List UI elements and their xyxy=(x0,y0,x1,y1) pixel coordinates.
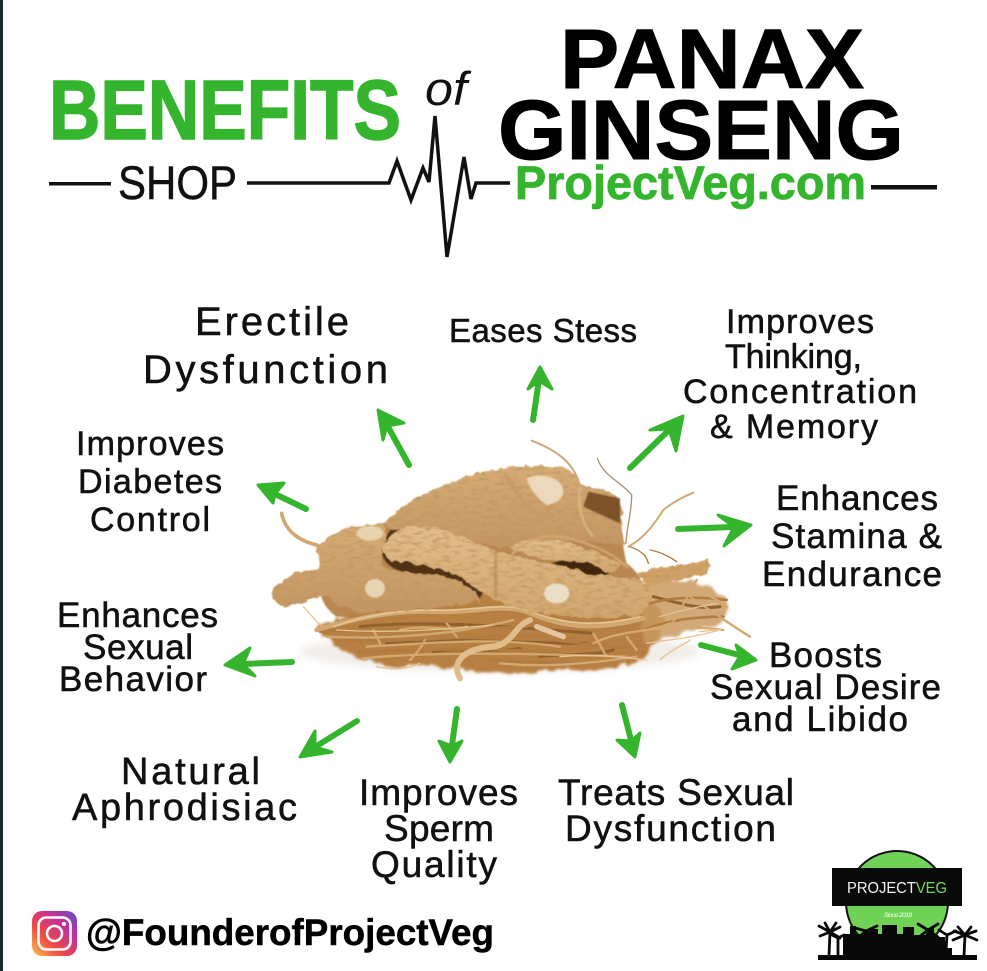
arrow: to sperm quality xyxy=(439,709,462,762)
header: heartbeat line xyxy=(247,116,510,257)
label: enhances stamina: Enhances xyxy=(776,479,938,518)
arrow: to treats dysfunction xyxy=(617,705,640,757)
logo skyline xyxy=(818,925,977,960)
right finger root xyxy=(508,540,622,573)
label: boosts desire: and Libido xyxy=(732,700,908,739)
label: improves diabetes control: Diabetes xyxy=(78,463,222,501)
logo palm trees xyxy=(819,923,977,956)
arrow: to sexual desire xyxy=(701,645,756,669)
base behind the main roots xyxy=(319,473,645,629)
arrow: to eases stress xyxy=(528,367,552,420)
label: improves thinking: Improves xyxy=(726,303,874,341)
label: erectile dysfunction xyxy=(143,300,388,392)
right fibre cluster xyxy=(643,579,729,643)
header: panax ginseng title xyxy=(498,12,904,177)
centre root xyxy=(383,526,651,618)
label: improves thinking: Concentration xyxy=(683,373,917,411)
pale highlights and ridges xyxy=(357,476,628,603)
dark shadow areas between roots xyxy=(381,530,493,598)
label: enhances stamina xyxy=(762,479,942,594)
label: improves sperm quality: Sperm xyxy=(384,808,494,849)
soft ground shadow xyxy=(300,632,700,672)
base mass of the fibrous rootlets xyxy=(315,597,663,673)
label: improves sperm quality: Quality xyxy=(371,844,498,885)
header: shop line with left rule xyxy=(49,156,237,209)
arrow: to stamina xyxy=(678,515,751,546)
label: enhances sexual behavior: Sexual xyxy=(83,628,193,667)
header: panax ginseng title: PANAX xyxy=(560,12,864,106)
logo: projectveg: Since 2019 xyxy=(884,912,912,919)
header: benefits heading: BENEFITS xyxy=(49,63,401,157)
label: boosts desire: Sexual Desire xyxy=(710,668,941,707)
arrow: to diabetes control xyxy=(258,483,306,509)
label: improves thinking xyxy=(683,303,917,446)
upper root xyxy=(387,466,624,548)
label: treats sexual dysfunction xyxy=(558,772,794,849)
header: the word of: of xyxy=(425,62,472,115)
instagram handle: @FounderofProjectVeg xyxy=(86,912,494,953)
arrow: to aphrodisiac xyxy=(300,721,357,757)
label: improves thinking: Thinking, xyxy=(725,338,862,376)
label: improves diabetes control xyxy=(76,425,224,539)
label: treats sexual dysfunction: Treats Sexual xyxy=(558,772,794,813)
header: shop line with left rule: SHOP xyxy=(118,156,237,209)
arrow: to erectile dysfunction xyxy=(378,410,409,465)
label: enhances stamina: Endurance xyxy=(762,555,942,594)
left root xyxy=(272,525,480,613)
label: erectile dysfunction: Dysfunction xyxy=(143,348,388,392)
label: enhances sexual behavior: Enhances xyxy=(57,596,218,635)
arrow: to sexual behavior xyxy=(225,648,292,676)
label: improves sperm quality: Improves xyxy=(359,772,518,813)
label: natural aphrodisiac xyxy=(72,751,297,829)
image: ginseng roots xyxy=(272,441,750,678)
label: enhances sexual behavior xyxy=(57,596,218,699)
arrow: to thinking and memory xyxy=(630,416,683,468)
left edge strip xyxy=(0,0,3,971)
label: enhances stamina: Stamina & xyxy=(771,517,942,556)
label: enhances sexual behavior: Behavior xyxy=(59,660,207,699)
label: erectile dysfunction: Erectile xyxy=(195,300,349,344)
label: eases stess: Eases Stess xyxy=(449,312,637,349)
header: website address with right rule: ProjectVeg.com xyxy=(515,156,866,209)
right tail root xyxy=(637,559,710,587)
header: panax ginseng title: GINSENG xyxy=(498,83,904,177)
fibrous rootlets xyxy=(282,441,750,678)
label: improves diabetes control: Control xyxy=(90,501,210,539)
label: boosts desire xyxy=(710,636,941,739)
label: improves thinking: & Memory xyxy=(710,408,878,446)
label: natural aphrodisiac: Natural xyxy=(121,751,260,793)
label: boosts desire: Boosts xyxy=(769,636,882,675)
icon: instagram xyxy=(32,911,77,956)
label: improves sperm quality xyxy=(359,772,518,885)
label: treats sexual dysfunction: Dysfunction xyxy=(565,808,776,849)
label: natural aphrodisiac: Aphrodisiac xyxy=(72,787,297,829)
label: improves diabetes control: Improves xyxy=(76,425,224,463)
logo: projectveg: PROJECTVEG xyxy=(847,880,947,897)
logo: projectveg xyxy=(818,851,977,960)
